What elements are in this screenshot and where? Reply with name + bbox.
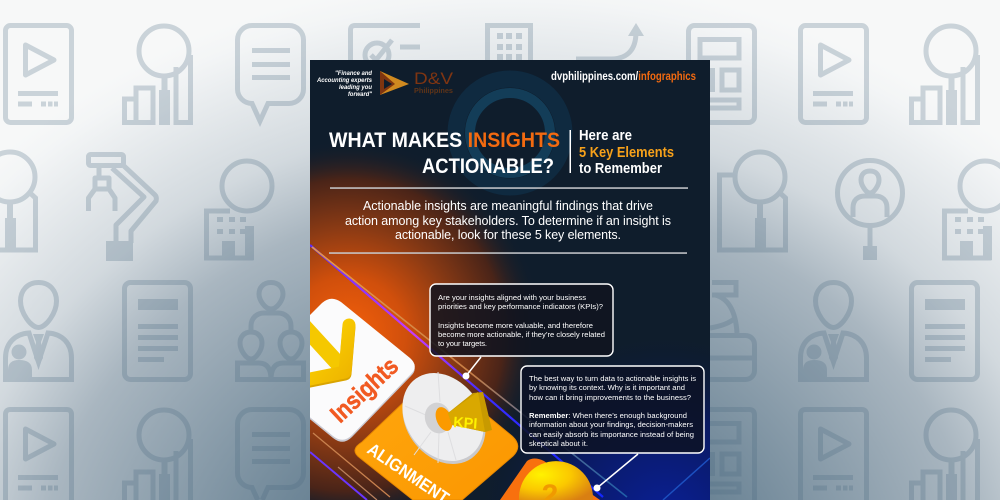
icon: desk stack	[686, 282, 754, 380]
intro text	[345, 199, 671, 242]
icon: people group	[238, 282, 304, 380]
icon: speech bubble, row 1	[238, 26, 304, 121]
icon: robot arm	[88, 154, 156, 261]
diagonal light lines	[310, 245, 710, 500]
title: WHAT MAKES INSIGHTS	[329, 129, 560, 152]
icon: business person	[6, 282, 72, 382]
icon: KPI donut: KPI	[453, 414, 478, 433]
header: D&V logo: Philippines	[414, 86, 453, 95]
intro text: Actionable insights are meaningful findings that drive	[363, 199, 653, 213]
icon: video document, row 4	[6, 410, 72, 500]
icon: person in magnifier	[838, 160, 902, 260]
callout: context: information about your findings, decision-makers	[529, 420, 693, 429]
icon: video document, row 1	[6, 26, 72, 122]
tile: insights: Insights	[325, 352, 404, 428]
icon: magnifier chart, row 4 right	[912, 410, 978, 500]
icon: checklist card	[350, 26, 420, 70]
icon: video document, row 4 right	[800, 410, 866, 500]
icon: yellow arrow	[300, 322, 349, 382]
subtitle	[579, 130, 674, 173]
callout: context: The best way to turn data to actionable insights is	[529, 374, 696, 383]
header: tagline: "Finance and	[335, 70, 373, 77]
icon: magnifier document, row 2 left	[0, 152, 36, 252]
icon: growth arrow	[576, 23, 644, 59]
header: D&V logo: D&V	[414, 69, 454, 88]
callout: alignment: become more actionable, if they’re closely related	[438, 330, 605, 339]
icon: business person right	[800, 282, 866, 382]
title	[329, 132, 560, 173]
header: tagline	[316, 70, 372, 96]
subtitle: 5 Key Elements	[579, 145, 674, 161]
icon: KPI donut	[402, 372, 492, 464]
callout: alignment	[430, 284, 613, 380]
callout: context	[521, 366, 704, 492]
callout: context: Remember: When there’s enough background	[529, 411, 687, 420]
tile: alignment	[354, 402, 518, 500]
header: tagline: Accounting experts	[316, 77, 372, 84]
header: website URL: dvphilippines.com/infographics	[551, 69, 696, 83]
header: D&V logo	[380, 69, 454, 95]
concentric rings	[456, 79, 564, 187]
title divider	[570, 130, 571, 173]
icon: speech bubble, row 4	[238, 410, 304, 500]
icon: video document, row 1 right	[800, 26, 866, 122]
callout: context: by knowing its context. Why is it important and	[529, 383, 685, 392]
icon: magnifier building	[206, 161, 272, 260]
callout: alignment: to your targets.	[438, 339, 487, 348]
intro text: actionable, look for these 5 key elements.	[395, 228, 621, 242]
callout: context: skeptical about it.	[529, 439, 588, 448]
callout: alignment: Insights become more valuable, and therefore	[438, 321, 593, 330]
callout: context: can easily absorb its importance instead of being	[529, 430, 694, 439]
icon: magnifier building right	[944, 161, 1000, 260]
icon: news layout	[688, 26, 754, 122]
callout: context: how can it bring improvements to the business?	[529, 393, 691, 402]
subtitle: to Remember	[579, 161, 662, 177]
subtitle: Here are	[579, 128, 632, 144]
title: ACTIONABLE?	[422, 155, 554, 178]
icon: office building	[488, 26, 530, 70]
icon: magnifier chart, row 1	[124, 26, 190, 125]
header: tagline: leading you	[339, 84, 372, 91]
header: tagline: forward"	[348, 91, 373, 98]
panel: infographic poster	[310, 60, 710, 500]
callout: alignment: Are your insights aligned with your business	[438, 293, 586, 302]
tile: number two	[500, 458, 600, 500]
icon: news layout, row 4	[688, 410, 754, 500]
icon: magnifier chart, row 1 right	[912, 26, 978, 125]
intro text: action among key stakeholders. To determine if an insight is	[345, 214, 671, 228]
tile: insights	[310, 298, 415, 442]
callout: alignment: priorities and key performance indicators (KPIs)?	[438, 302, 603, 311]
icon: magnifier document	[720, 152, 786, 252]
icon: text document right	[912, 282, 978, 380]
icon: text document	[124, 282, 190, 380]
icon: magnifier chart, row 4	[124, 410, 190, 500]
